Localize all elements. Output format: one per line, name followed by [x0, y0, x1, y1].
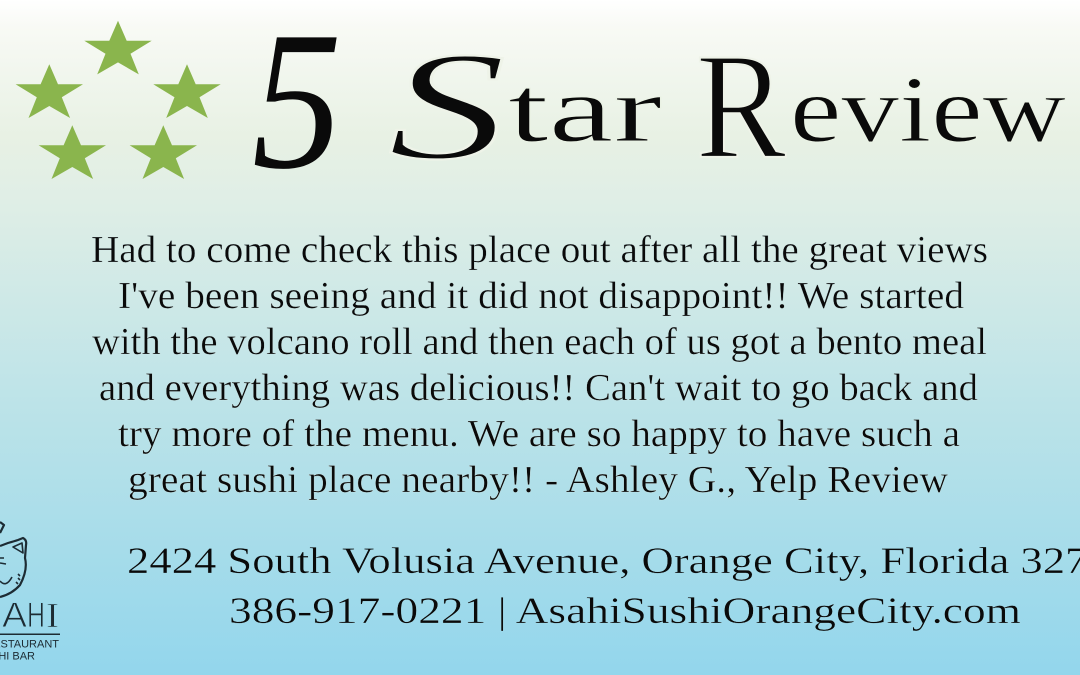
review text	[91, 229, 988, 501]
review text: with the volcano roll and then each of us got a bento meal	[92, 321, 987, 363]
contact details: 2424 South Volusia Avenue, Orange City, Florida 32763	[127, 541, 1080, 582]
title: tar	[508, 58, 662, 162]
title: R	[696, 22, 787, 190]
logo wordmark: H	[27, 596, 45, 635]
icon: five green stars	[16, 21, 221, 179]
logo tagline	[0, 638, 59, 662]
contact details	[127, 541, 1080, 632]
review text: and everything was delicious!! Can't wait to go back and	[99, 367, 978, 409]
title	[252, 0, 1066, 210]
review text: I've been seeing and it did not disappoint!! We started	[118, 275, 964, 317]
review text: try more of the menu. We are so happy to have such a	[118, 413, 960, 455]
logo: Asahi restaurant	[0, 522, 60, 662]
logo wordmark	[0, 596, 59, 635]
logo wordmark: A	[2, 596, 28, 635]
title: S	[388, 20, 506, 192]
logo wordmark: I	[46, 596, 59, 635]
contact details: 386-917-0221 | AsahiSushiOrangeCity.com	[229, 591, 1021, 632]
review text: great sushi place nearby!! - Ashley G., Yelp Review	[128, 459, 949, 501]
icon: cat face	[0, 522, 26, 597]
review text: Had to come check this place out after all the great views	[91, 229, 988, 271]
title: eview	[790, 58, 1066, 162]
